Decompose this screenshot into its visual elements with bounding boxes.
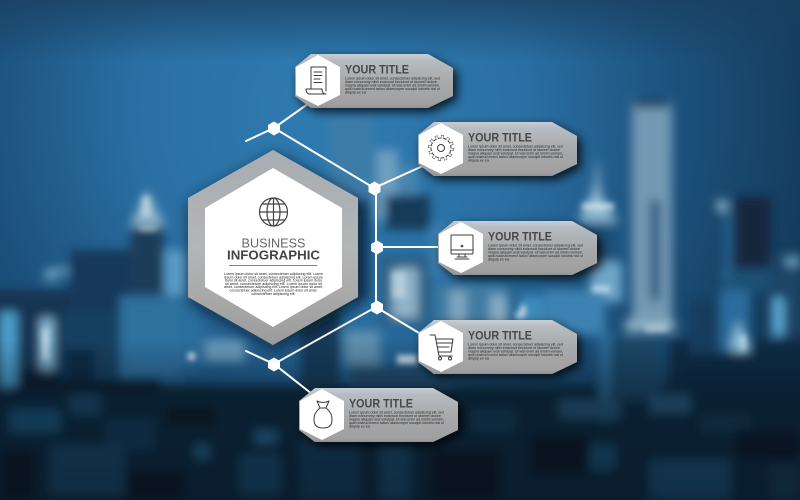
lower city mass xyxy=(0,385,800,500)
central body text: ipsum dolor sit amet, consectetuer adipiscing elit. Lorem ipsum xyxy=(224,275,323,279)
body text: quis nostrud exerci tation ullamcorper suscipit lobortis nisl ut xyxy=(488,254,583,258)
icon: monitor xyxy=(451,235,473,259)
body text: diam nonummy nibh euismod tincidunt ut laoreet dolore xyxy=(345,80,437,84)
icon: globe xyxy=(260,198,288,226)
body text: magna aliquam erat volutpat. Ut wisi enim ad minim veniam, xyxy=(349,418,444,422)
hexagon badge xyxy=(419,123,463,174)
icon: gear xyxy=(430,136,452,160)
body text xyxy=(345,76,440,94)
body text: Lorem ipsum dolor sit amet, consectetuer adipiscing elit, sed xyxy=(468,144,563,148)
body text: magna aliquam erat volutpat. Ut wisi enim ad minim veniam, xyxy=(468,152,563,156)
central body text: Lorem ipsum dolor sit amet, consectetuer adipiscing elit. Lorem xyxy=(224,272,323,276)
title: YOUR TITLE xyxy=(488,232,552,244)
body text: quis nostrud exerci tation ullamcorper suscipit lobortis nisl ut xyxy=(349,421,444,425)
connector nodes xyxy=(268,122,383,372)
title: YOUR TITLE xyxy=(345,64,409,76)
body text: diam nonummy nibh euismod tincidunt ut laoreet dolore xyxy=(488,247,580,251)
panel: card 1 document xyxy=(295,54,453,108)
right skyline xyxy=(632,100,672,322)
card body xyxy=(299,388,458,442)
left skyline xyxy=(70,250,130,380)
title: YOUR TITLE xyxy=(468,132,532,144)
body text xyxy=(468,144,563,162)
central body text: amet, consectetuer adipiscing elit. Lorem ipsum dolor sit amet, xyxy=(224,285,323,289)
heading: business infographic: INFOGRAPHIC xyxy=(227,248,320,262)
body text: Lorem ipsum dolor sit amet, consectetuer adipiscing elit, sed xyxy=(468,342,563,346)
panel: card 2 gear xyxy=(418,122,577,176)
body text xyxy=(468,342,563,360)
icon: money bag xyxy=(314,401,332,428)
body text: quis nostrud exerci tation ullamcorper suscipit lobortis nisl ut xyxy=(468,155,563,159)
title: YOUR TITLE xyxy=(468,330,532,342)
body text: quis nostrud exerci tation ullamcorper suscipit lobortis nisl ut xyxy=(345,87,440,91)
card body xyxy=(438,221,597,275)
body text: magna aliquam erat volutpat. Ut wisi enim ad minim veniam, xyxy=(488,250,583,254)
body text: magna aliquam erat volutpat. Ut wisi enim ad minim veniam, xyxy=(468,350,563,354)
heading: business infographic xyxy=(227,236,320,262)
hexagon badge xyxy=(296,55,340,106)
hexagon badge xyxy=(419,321,463,372)
icon: shopping cart xyxy=(430,335,453,360)
body text: aliquip ex ea xyxy=(468,158,490,162)
body text: magna aliquam erat volutpat. Ut wisi enim ad minim veniam, xyxy=(345,84,440,88)
body text: Lorem ipsum dolor sit amet, consectetuer adipiscing elit, sed xyxy=(349,410,444,414)
central body text: consectetuer adipiscing elit. xyxy=(252,292,296,296)
body text: diam nonummy nibh euismod tincidunt ut laoreet dolore xyxy=(468,346,560,350)
body text: Lorem ipsum dolor sit amet, consectetuer adipiscing elit, sed xyxy=(488,244,583,248)
inner white hexagon xyxy=(205,168,342,327)
body text: aliquip ex ea xyxy=(488,258,510,262)
panel: central hexagon xyxy=(188,150,358,345)
body text xyxy=(349,410,444,428)
heading: business infographic: BUSINESS xyxy=(242,236,306,250)
connector lines xyxy=(246,101,442,394)
card body xyxy=(295,54,453,108)
panel: card 5 money bag xyxy=(299,388,458,442)
body text: Lorem ipsum dolor sit amet, consectetuer adipiscing elit, sed xyxy=(345,76,440,80)
central body text: sit amet, consectetuer adipiscing elit. Lorem ipsum dolor sit xyxy=(225,282,322,286)
body text xyxy=(488,244,583,262)
center buildings xyxy=(330,115,372,205)
panel: card 4 cart xyxy=(418,320,577,374)
hexagon badge xyxy=(300,389,344,440)
body text: aliquip ex ea xyxy=(345,90,367,94)
hexagon badge xyxy=(439,222,483,273)
body text: diam nonummy nibh euismod tincidunt ut laoreet dolore xyxy=(468,148,560,152)
central body text: consectetuer adipiscing elit. Lorem ipsum dolor sit amet, xyxy=(230,288,318,292)
body text: aliquip ex ea xyxy=(349,424,371,428)
central body text: dolor sit amet, consectetuer adipiscing elit. Lorem ipsum dolor xyxy=(225,279,323,283)
body text: aliquip ex ea xyxy=(468,356,490,360)
card body xyxy=(418,122,577,176)
outer grey hexagon xyxy=(188,150,358,345)
card body xyxy=(418,320,577,374)
body text: diam nonummy nibh euismod tincidunt ut laoreet dolore xyxy=(349,414,441,418)
panel: card 3 monitor xyxy=(438,221,597,275)
icon: document scroll xyxy=(306,67,326,94)
title: YOUR TITLE xyxy=(349,398,413,410)
mottled lower city xyxy=(10,410,60,432)
central body text xyxy=(224,272,323,296)
body text: quis nostrud exerci tation ullamcorper suscipit lobortis nisl ut xyxy=(468,353,563,357)
